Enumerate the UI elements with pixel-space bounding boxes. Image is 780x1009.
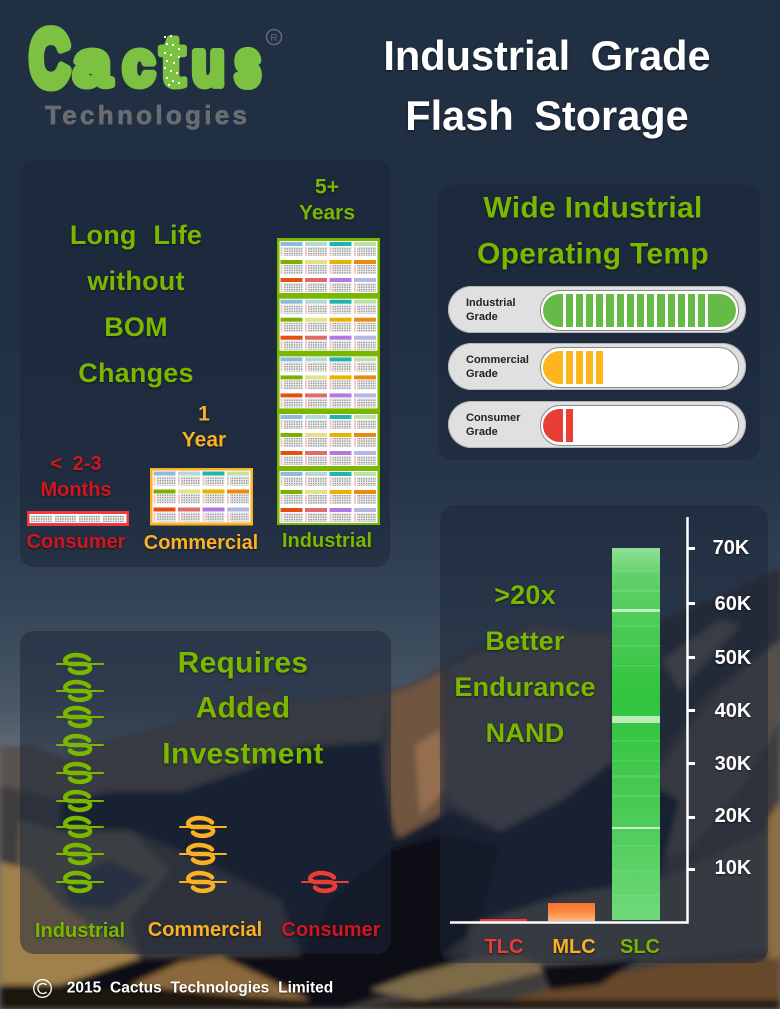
heading: long life: without xyxy=(87,266,185,296)
y-axis labels: 40K xyxy=(715,700,751,722)
gauge: industrial grade: Industrial Grade xyxy=(466,297,516,322)
y-axis labels: 10K xyxy=(715,857,751,879)
heading: long life xyxy=(70,220,202,389)
label: consumer: Consumer xyxy=(27,531,125,553)
label: under 2-3 months: < 2-3 xyxy=(50,453,102,475)
heading: requires added investment: Investment xyxy=(162,738,324,770)
label: 1 year: 1 xyxy=(198,402,210,425)
logo word: Cactus: a xyxy=(74,29,111,99)
gauge: consumer grade xyxy=(448,401,746,448)
title line 1: Industrial Grade xyxy=(383,32,711,79)
logo: Cactus Technologies xyxy=(28,15,282,130)
logo word: Cactus: t xyxy=(160,21,185,102)
icon stack: industrial dollars xyxy=(56,652,104,894)
registered mark xyxy=(266,30,282,44)
calendar: commercial xyxy=(150,468,253,526)
icon stack: commercial dollars xyxy=(179,816,227,894)
logo word: Cactus xyxy=(30,15,261,102)
label: 5+ years xyxy=(299,175,355,224)
gauge: consumer grade: Consumer Grade xyxy=(466,412,520,438)
heading: wide industrial operating temp xyxy=(477,192,709,271)
logo speckles on the t xyxy=(164,35,180,86)
y-axis labels: 20K xyxy=(715,805,751,827)
bar chart: NAND endurance xyxy=(450,517,689,924)
calendar: consumer xyxy=(27,511,129,526)
y-axis labels xyxy=(713,537,752,879)
y-axis labels: 50K xyxy=(715,647,751,669)
heading: better endurance nand xyxy=(454,580,596,748)
heading: better endurance nand: >20x xyxy=(494,580,556,610)
bar: TLC xyxy=(480,919,527,922)
panel: investment xyxy=(20,631,391,954)
copyright text: 2015 Cactus Technologies Limited xyxy=(67,979,333,996)
heading: better endurance nand: NAND xyxy=(486,718,564,748)
heading: requires added investment: Added xyxy=(196,692,290,724)
logo word: Cactus: c xyxy=(123,29,155,99)
copyright symbol xyxy=(33,979,52,998)
calendar: industrial xyxy=(277,238,380,525)
title xyxy=(383,32,711,140)
label: industrial: Industrial xyxy=(282,530,372,552)
heading: requires added investment xyxy=(162,646,324,770)
label: under 2-3 months: Months xyxy=(40,479,112,501)
y-axis labels: 60K xyxy=(715,593,751,615)
label: commercial: Commercial xyxy=(144,532,258,554)
copyright footer xyxy=(33,979,333,998)
logo word: Cactus: s xyxy=(235,29,261,99)
gauge: commercial grade xyxy=(448,343,746,390)
heading: long life: Changes xyxy=(78,358,194,388)
heading: better endurance nand: Better xyxy=(485,626,565,656)
title line 2: Flash Storage xyxy=(405,92,689,139)
y-axis labels: 70K xyxy=(713,537,749,559)
label: under 2-3 months xyxy=(40,453,112,501)
label: 5+ years: Years xyxy=(299,201,355,224)
label: MLC: MLC xyxy=(552,936,596,958)
label: commercial: Commercial xyxy=(148,919,262,941)
registered mark: R xyxy=(270,33,278,44)
heading: long life: BOM xyxy=(104,312,168,342)
y-axis labels: 30K xyxy=(715,753,751,775)
panel: operating temperature xyxy=(438,185,760,460)
heading: long life: Long Life xyxy=(70,220,202,250)
bar: MLC xyxy=(548,903,595,921)
label: SLC: SLC xyxy=(620,936,660,958)
panel: long life xyxy=(20,160,390,567)
y-axis ticks xyxy=(688,547,695,871)
heading: requires added investment: Requires xyxy=(178,646,308,680)
heading: better endurance nand: Endurance xyxy=(454,672,596,702)
label: consumer: Consumer xyxy=(282,919,380,941)
label: 5+ years: 5+ xyxy=(315,175,339,198)
label: 1 year: Year xyxy=(182,428,226,451)
gauge: commercial grade: Commercial Grade xyxy=(466,354,529,380)
chart axes xyxy=(450,517,688,922)
calendars: consumer, commercial, industrial xyxy=(27,238,380,526)
label: TLC: TLC xyxy=(485,936,523,958)
label: 1 year xyxy=(182,402,226,451)
heading: wide industrial operating temp: Operating Temp xyxy=(477,238,709,270)
icon: consumer dollar xyxy=(301,870,349,894)
logo word: Cactus: u xyxy=(192,30,225,99)
label: industrial: Industrial xyxy=(35,920,125,942)
panel: endurance xyxy=(440,505,768,963)
bar: SLC xyxy=(612,548,660,920)
gauge: industrial grade xyxy=(448,286,746,333)
heading: wide industrial operating temp: Wide Industrial xyxy=(483,192,703,224)
logo word: Cactus: C xyxy=(30,15,69,102)
logo word: Technologies: Technologies xyxy=(45,100,247,130)
